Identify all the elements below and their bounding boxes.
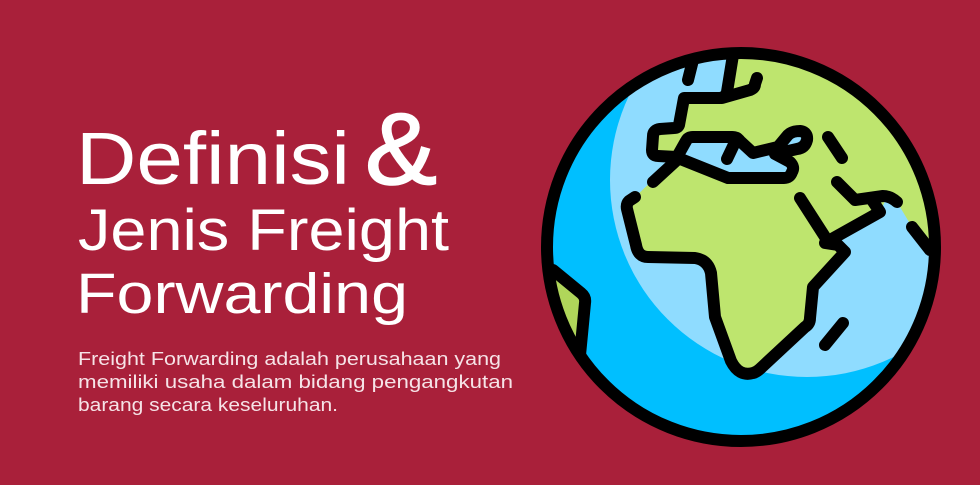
title: Jenis Freight [78, 198, 449, 263]
land: Europe, Africa and Asia [632, 59, 929, 368]
land: South America [556, 280, 580, 337]
infographic canvas [79, 47, 941, 447]
coastlines [553, 55, 930, 374]
ocean highlight [610, 60, 929, 377]
title: & [365, 92, 437, 206]
description text: Freight Forwarding adalah perusahaan yang [78, 349, 501, 369]
description text [78, 349, 513, 415]
ocean [553, 96, 894, 435]
globe outline [547, 53, 935, 441]
description text: barang secara keseluruhan. [78, 395, 338, 415]
sea: Black Sea [788, 137, 802, 145]
title [76, 92, 449, 326]
sea: Mediterranean [685, 143, 788, 172]
description text: memiliki usaha dalam bidang pengangkutan [78, 372, 513, 392]
title: Forwarding [76, 262, 408, 326]
icon: earth globe [541, 47, 941, 447]
title: Definisi [76, 117, 350, 200]
